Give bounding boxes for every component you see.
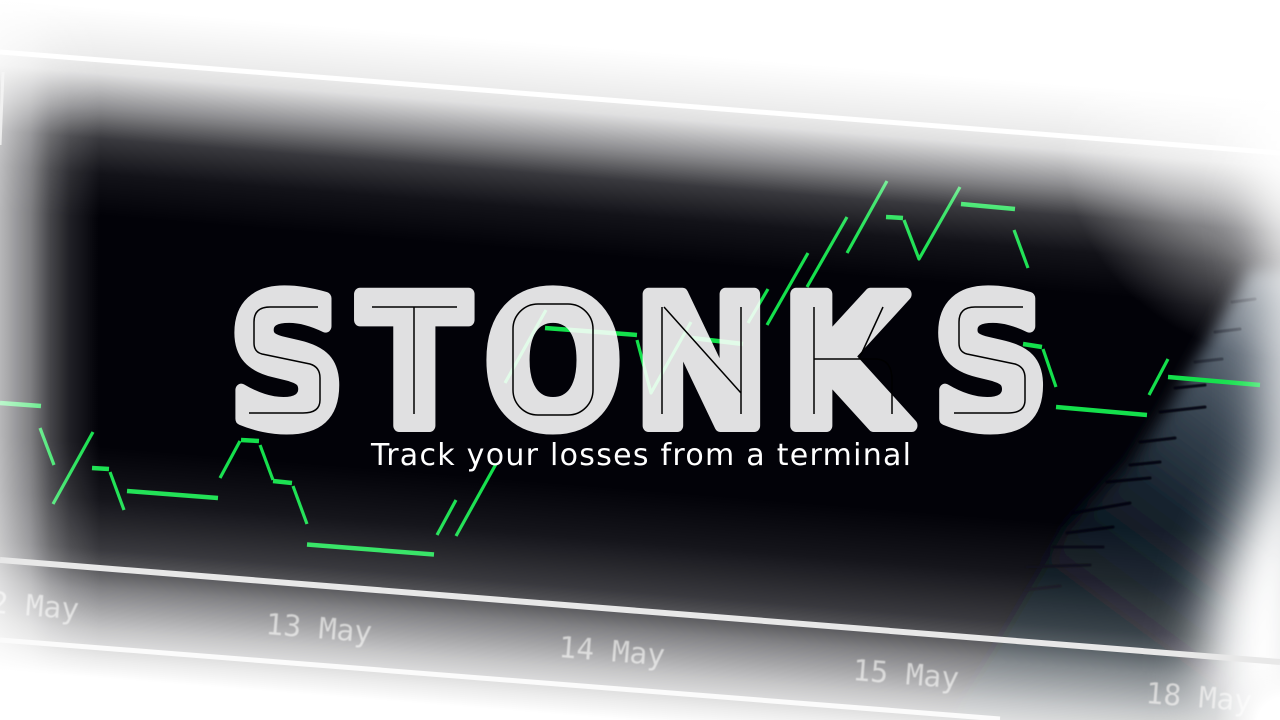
date: 14 May: 14 May bbox=[557, 630, 666, 672]
date: 15 May: 15 May bbox=[851, 653, 960, 695]
green price line chart bbox=[0, 181, 1260, 554]
date: 13 May: 13 May bbox=[264, 607, 373, 649]
subtitle: Track your losses from a terminal bbox=[370, 438, 911, 473]
date axis labels bbox=[0, 584, 1253, 718]
title: STONKS: STONKS bbox=[229, 259, 1049, 469]
date: 18 May: 18 May bbox=[1144, 676, 1253, 718]
title inline strokes bbox=[249, 304, 1025, 415]
water reflection region bbox=[950, 270, 1280, 720]
